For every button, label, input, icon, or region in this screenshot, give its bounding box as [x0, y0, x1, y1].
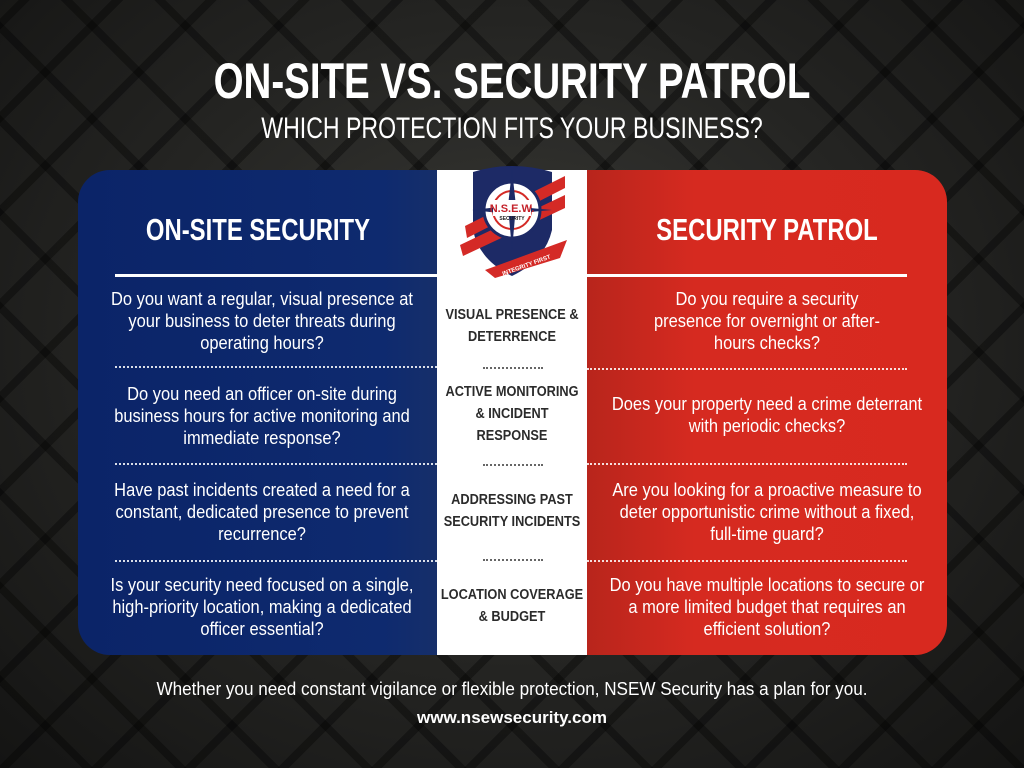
text: on-site question 4: officer essential? [200, 618, 324, 639]
label: location coverage: LOCATION COVERAGE [441, 587, 583, 603]
label: visual presence: VISUAL PRESENCE & [445, 307, 579, 323]
text: patrol question 4: Do you have multiple locations to secure or [610, 574, 924, 595]
label: active monitoring: ACTIVE MONITORING [445, 384, 579, 400]
text: patrol question 3: Are you looking for a proactive measure to [612, 479, 922, 500]
text: on-site question 4 [111, 574, 413, 639]
text: patrol question 3: full-time guard? [710, 523, 824, 544]
text: on-site question 1: Do you want a regular, visual presence at [111, 288, 413, 309]
text: on-site question 1: your business to deter threats during [128, 310, 396, 331]
text: on-site question 2: business hours for active monitoring and [114, 405, 410, 426]
panel: security patrol column [587, 170, 947, 655]
label: past incidents [444, 492, 580, 530]
icon: NSEW shield logo: INTEGRITY FIRST [502, 254, 552, 278]
text: patrol question 2: with periodic checks? [689, 415, 845, 436]
text: patrol question 3: deter opportunistic crime without a fixed, [620, 501, 914, 522]
text: patrol question 4: a more limited budget that requires an [628, 596, 906, 617]
panel: center categories column [437, 170, 587, 655]
title: ON-SITE VS. SECURITY PATROL [214, 53, 810, 109]
text: patrol question 1: hours checks? [714, 332, 820, 353]
text: patrol question 2 [612, 393, 922, 436]
footer text: Whether you need constant vigilance or flexible protection, NSEW Security has a plan for you. [157, 679, 867, 699]
subtitle: WHICH PROTECTION FITS YOUR BUSINESS? [261, 112, 763, 145]
text: on-site question 1: operating hours? [200, 332, 324, 353]
label: active monitoring: & INCIDENT [475, 406, 549, 422]
heading: on-site security: ON-SITE SECURITY [146, 212, 370, 247]
panel: on-site security column [78, 170, 437, 655]
text: on-site question 4: Is your security need focused on a single, [111, 574, 413, 595]
label: past incidents: ADDRESSING PAST [451, 492, 573, 508]
text: patrol question 4 [610, 574, 924, 639]
text: on-site question 2: Do you need an officer on-site during [127, 383, 397, 404]
label: location coverage [441, 587, 583, 625]
text: patrol question 3 [612, 479, 922, 544]
text: on-site question 3: recurrence? [218, 523, 306, 544]
text: on-site question 2: immediate response? [183, 427, 341, 448]
text: on-site question 2 [114, 383, 410, 448]
text: on-site question 3 [114, 479, 410, 544]
text: patrol question 1: presence for overnight or after- [654, 310, 880, 331]
footer url: www.nsewsecurity.com [417, 708, 607, 727]
label: location coverage: & BUDGET [479, 609, 545, 625]
icon: NSEW shield logo: SECURITY [499, 216, 525, 222]
text: patrol question 1: Do you require a security [675, 288, 859, 309]
label: past incidents: SECURITY INCIDENTS [444, 514, 580, 530]
label: active monitoring: RESPONSE [477, 428, 547, 444]
text: on-site question 3: constant, dedicated presence to prevent [116, 501, 408, 522]
text: patrol question 2: Does your property need a crime deterrant [612, 393, 922, 414]
label: visual presence: DETERRENCE [468, 329, 556, 345]
text: patrol question 4: efficient solution? [704, 618, 830, 639]
label: visual presence [445, 307, 579, 345]
icon: NSEW shield logo [460, 166, 567, 278]
icon: NSEW shield logo: N.S.E.W. [490, 203, 534, 215]
panel: comparison [78, 170, 947, 655]
heading: security patrol: SECURITY PATROL [656, 212, 878, 247]
text: on-site question 1 [111, 288, 413, 353]
text: on-site question 3: Have past incidents created a need for a [114, 479, 410, 500]
text: on-site question 4: high-priority location, making a dedicated [112, 596, 412, 617]
label: active monitoring [445, 384, 579, 444]
text: patrol question 1 [654, 288, 880, 353]
